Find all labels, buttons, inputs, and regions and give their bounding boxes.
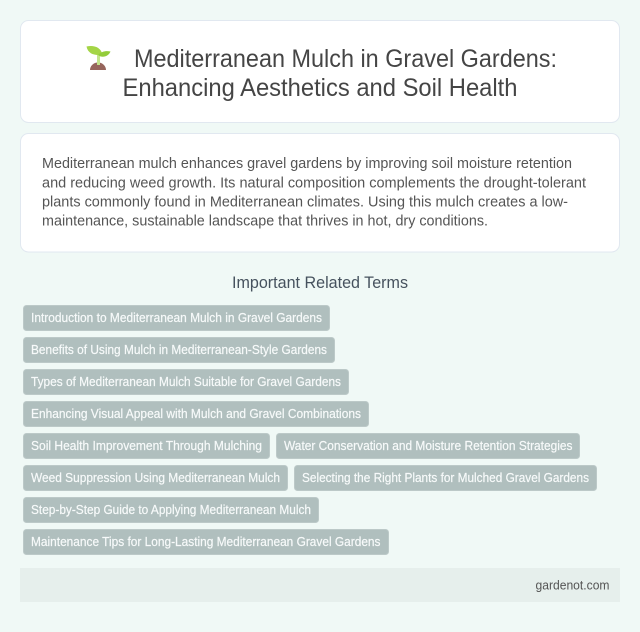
chip: maintenance: Maintenance Tips for Long-Lasting Mediterranean Gravel Gardens: [31, 535, 380, 549]
chip: types: [24, 370, 348, 394]
chip: weed suppression: Weed Suppression Using Mediterranean Mulch: [31, 471, 280, 485]
icon: seedling: [86, 46, 110, 70]
chip: benefits: Benefits of Using Mulch in Mediterranean-Style Gardens: [31, 343, 327, 357]
chip: visual appeal: [24, 402, 368, 426]
chip: step-by-step: [24, 498, 318, 522]
chip: water conservation: [276, 434, 580, 458]
description text: [42, 156, 586, 230]
title: Mediterranean Mulch in Gravel Gardens:: [134, 45, 557, 73]
chip: maintenance: [24, 530, 388, 554]
chip: step-by-step: Step-by-Step Guide to Applying Mediterranean Mulch: [31, 503, 311, 517]
chip: water conservation: Water Conservation and Moisture Retention Strategies: [284, 439, 572, 453]
chip: soil health: Soil Health Improvement Through Mulching: [31, 439, 262, 453]
footer source: gardenot.com: [536, 578, 610, 592]
chip: visual appeal: Enhancing Visual Appeal with Mulch and Gravel Combinations: [31, 407, 361, 421]
footer bar: [20, 568, 620, 602]
description text: maintenance, sustainable landscape that thrives in hot, dry conditions.: [42, 214, 488, 230]
panel: description: [20, 134, 620, 252]
chip: soil health: [24, 434, 270, 458]
chip: selecting plants: Selecting the Right Plants for Mulched Gravel Gardens: [302, 471, 589, 485]
chip: benefits: [24, 338, 334, 362]
panel: title card: [20, 20, 620, 122]
chip: weed suppression: [24, 466, 288, 490]
chip: types: Types of Mediterranean Mulch Suitable for Gravel Gardens: [31, 375, 341, 389]
chip: introduction: Introduction to Mediterranean Mulch in Gravel Gardens: [31, 311, 322, 325]
description text: Mediterranean mulch enhances gravel gardens by improving soil moisture retention: [42, 156, 572, 172]
panel: related terms chips: [24, 306, 596, 554]
description text: plants commonly found in Mediterranean climates. Using this mulch creates a low-: [42, 194, 568, 210]
title: [122, 45, 557, 102]
heading: related terms: Important Related Terms: [232, 274, 408, 292]
title: Enhancing Aesthetics and Soil Health: [122, 74, 518, 102]
description text: and reducing weed growth. Its natural composition complements the drought-tolerant: [42, 175, 586, 191]
chip: introduction: [24, 306, 330, 330]
chip: selecting plants: [294, 466, 596, 490]
